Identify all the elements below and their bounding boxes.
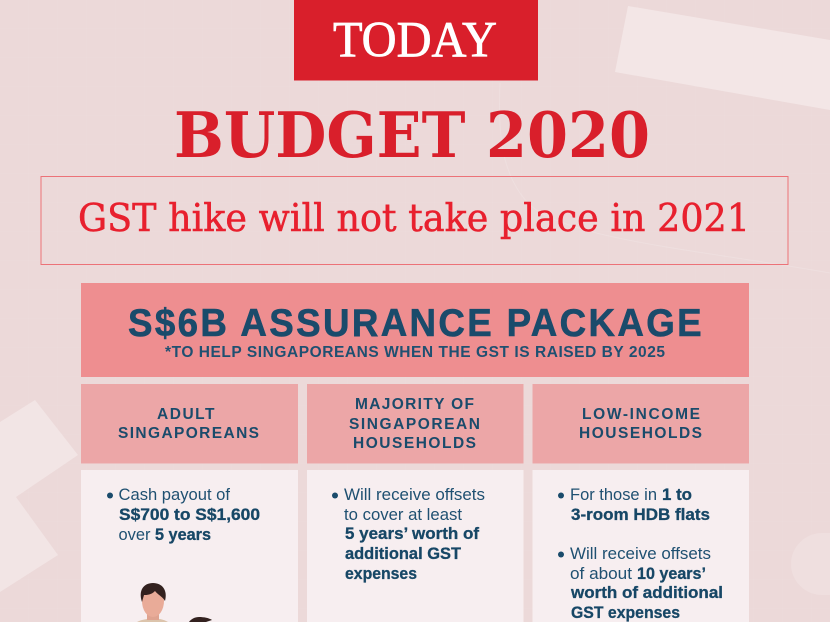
bullet text: offsets: additional GST (345, 544, 462, 563)
panel: low-income households details (532, 470, 749, 622)
bullet text: offsets: expenses (345, 564, 417, 583)
panel: adult Singaporeans details (81, 470, 298, 622)
background shape: right rounded blob (791, 533, 830, 595)
subtitle: GST hike will not take place in 2021 (78, 196, 750, 240)
bullet text: cash payout: over (118, 525, 151, 544)
bullet text: cash payout: 5 years (155, 525, 211, 544)
background shape: left zigzag (0, 400, 78, 592)
bullet text: offsets: worth of additional (570, 583, 723, 602)
title: BUDGET 2020 (174, 98, 650, 172)
bullet text: offsets: 5 years’ worth of (345, 524, 479, 543)
bullet text: cash payout (107, 485, 260, 544)
bullet text: cash payout: Cash payout of (118, 485, 230, 504)
bullet text: offsets: Will receive offsets (344, 485, 485, 504)
header text: ADULT (157, 406, 215, 423)
banner heading: S$6B ASSURANCE PACKAGE (128, 302, 704, 345)
bullet text: cash payout: S$700 to S$1,600 (119, 505, 260, 524)
header text (118, 406, 259, 442)
logo text: TODAY (333, 12, 497, 68)
panel: package banner (81, 283, 749, 377)
background shape: top right band (615, 6, 830, 110)
bullet text: offsets (332, 485, 485, 583)
panel: majority households header (307, 384, 524, 464)
header text: HOUSEHOLDS (579, 425, 702, 442)
header text: MAJORITY OF (355, 396, 474, 413)
header text: SINGAPOREANS (118, 425, 259, 442)
illustration: family (137, 583, 212, 622)
bullet text: HDB flats: 3-room HDB flats (571, 505, 710, 524)
logo block (294, 0, 538, 80)
header text (579, 406, 702, 442)
bullet text: offsets: Will receive offsets (570, 544, 711, 563)
bullet text: HDB flats: For those in (570, 485, 657, 504)
bullet text: offsets: to cover at least (344, 505, 462, 524)
bullet text: HDB flats: 1 to (662, 485, 692, 504)
bullet text: offsets: of about (570, 564, 632, 583)
bullet text: HDB flats (558, 485, 710, 524)
bullet text: offsets (558, 544, 723, 622)
panel: majority households details (307, 470, 524, 622)
header text: SINGAPOREAN (349, 416, 480, 433)
subtitle box (41, 176, 788, 264)
bullet text: offsets: GST expenses (571, 603, 680, 622)
header text: HOUSEHOLDS (353, 435, 476, 452)
panel: low-income households header (532, 384, 749, 464)
panel: adult Singaporeans header (81, 384, 298, 464)
header text (349, 396, 480, 452)
bullet text: offsets: 10 years’ (637, 564, 706, 583)
header text: LOW-INCOME (582, 406, 700, 423)
banner subheading: *TO HELP SINGAPOREANS WHEN THE GST IS RAISED BY 2025 (165, 344, 665, 361)
